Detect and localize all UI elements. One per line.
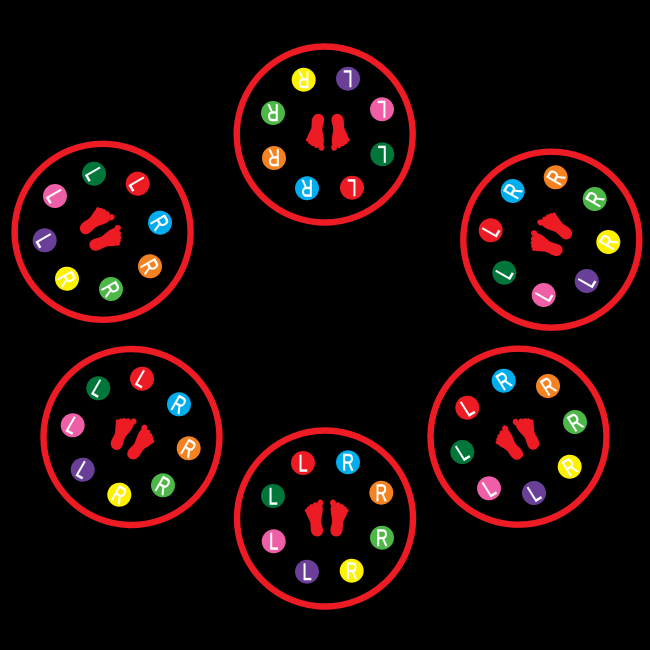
panel: lower left circle: [44, 349, 220, 525]
dot: dark green L: L: [491, 262, 519, 284]
dot: green R: [261, 99, 285, 126]
dot: blue R: R: [145, 211, 174, 235]
dot: green R: [145, 468, 180, 504]
dot: pink L: [527, 278, 562, 313]
dot: orange R: R: [135, 255, 164, 279]
dot: dark green L: L: [87, 375, 109, 403]
dot: yellow R: [49, 262, 84, 296]
dot: green R: R: [151, 471, 174, 501]
dot: blue R: [487, 364, 521, 399]
dot: purple L: [336, 64, 360, 91]
dot: green R: R: [376, 525, 388, 552]
dot: pink L: [472, 471, 507, 507]
dot: yellow R: R: [52, 267, 81, 291]
dot: blue R: R: [499, 180, 528, 203]
dot: orange R: [171, 431, 205, 467]
dot: yellow R: [340, 558, 364, 585]
dot: red L: L: [123, 173, 151, 195]
dot: orange R: R: [268, 144, 280, 171]
dot: yellow R: [292, 65, 316, 92]
dot: blue R: R: [167, 390, 190, 420]
dot: pink L: L: [478, 475, 500, 503]
icon: red feet: [490, 411, 547, 465]
dot: orange R: R: [375, 480, 387, 507]
dot: pink L: L: [377, 95, 387, 122]
icon: red feet: [75, 202, 128, 258]
dot: dark green L: L: [452, 439, 474, 466]
dot: purple L: [295, 559, 319, 586]
dot: green R: R: [96, 278, 125, 301]
dot: red L: L: [457, 395, 479, 422]
dot: yellow R: [591, 225, 627, 260]
dot: dark green L: [76, 157, 111, 191]
dot: pink L: L: [62, 412, 83, 440]
icon: red feet: [305, 500, 349, 536]
panel: lower right circle: [430, 349, 606, 525]
dot: blue R: [142, 206, 177, 240]
dot: red L: L: [477, 220, 505, 241]
panel: bottom circle: [237, 430, 413, 606]
dot: purple L: L: [523, 480, 545, 507]
dot: red L: L: [298, 450, 308, 477]
dot: red L: [291, 450, 315, 477]
dot: yellow R: [553, 450, 587, 485]
dot: dark green L: [445, 435, 480, 470]
dot: pink L: [262, 529, 286, 556]
dot: blue R: [295, 174, 319, 201]
dot: red L: [119, 167, 155, 201]
dot: yellow R: R: [346, 558, 358, 585]
dot: dark green L: [261, 483, 285, 510]
dot: purple L: L: [72, 456, 93, 484]
dot: purple L: [570, 264, 605, 299]
panel: top circle: [237, 46, 413, 222]
dot: yellow R: R: [298, 65, 310, 92]
dot: yellow R: R: [107, 481, 131, 510]
dot: red L: [450, 391, 485, 426]
dot: purple L: [517, 476, 552, 511]
dot: pink L: [37, 179, 72, 214]
dot: yellow R: [102, 478, 136, 513]
dot: blue R: [161, 387, 196, 423]
dot: orange R: [531, 369, 566, 404]
dot: red L: [474, 214, 509, 248]
dot: purple L: [26, 224, 62, 258]
dot: pink L: L: [269, 529, 278, 556]
dot: blue R: R: [342, 450, 354, 477]
dot: pink L: [55, 408, 89, 444]
dot: blue R: R: [492, 367, 516, 396]
dot: orange R: [539, 161, 574, 195]
panel: upper left circle: [15, 144, 191, 320]
dot: yellow R: R: [558, 453, 582, 482]
dot: red L: [340, 173, 364, 200]
dot: blue R: R: [301, 174, 313, 201]
dot: blue R: [496, 174, 531, 209]
dot: red L: L: [131, 365, 152, 393]
dot: green R: [578, 182, 613, 217]
dot: orange R: R: [542, 166, 571, 190]
dot: green R: [558, 405, 593, 440]
dot: green R: R: [581, 188, 610, 211]
dot: dark green L: L: [268, 483, 278, 510]
dot: orange R: [369, 480, 393, 507]
dot: purple L: [65, 453, 99, 488]
dot: orange R: [132, 250, 167, 284]
dot: pink L: [370, 95, 394, 122]
dot: orange R: R: [176, 434, 200, 464]
dot: red L: [124, 362, 159, 397]
dot: yellow R: R: [594, 231, 624, 254]
dot: dark green L: L: [79, 163, 107, 185]
dot: purple L: L: [573, 271, 601, 292]
dot: blue R: [336, 450, 360, 477]
icon: red feet: [103, 411, 159, 465]
dot: green R: R: [267, 99, 279, 126]
dot: green R: [93, 272, 128, 307]
dot: orange R: [262, 144, 286, 171]
dot: purple L: L: [343, 64, 353, 91]
dot: orange R: R: [536, 372, 561, 401]
dot: green R: [370, 525, 394, 552]
dot: dark green L: L: [378, 140, 387, 167]
dot: purple L: L: [302, 559, 312, 586]
dot: purple L: L: [30, 230, 58, 251]
dot: pink L: L: [40, 186, 68, 207]
icon: red feet: [306, 114, 350, 151]
dot: red L: L: [347, 173, 357, 200]
dot: dark green L: [487, 256, 523, 290]
icon: red feet: [524, 207, 577, 264]
dot: dark green L: [81, 371, 115, 407]
panel: upper right circle: [463, 152, 639, 328]
dot: pink L: L: [530, 285, 558, 306]
dot: green R: R: [563, 408, 588, 437]
dot: dark green L: [370, 140, 394, 167]
